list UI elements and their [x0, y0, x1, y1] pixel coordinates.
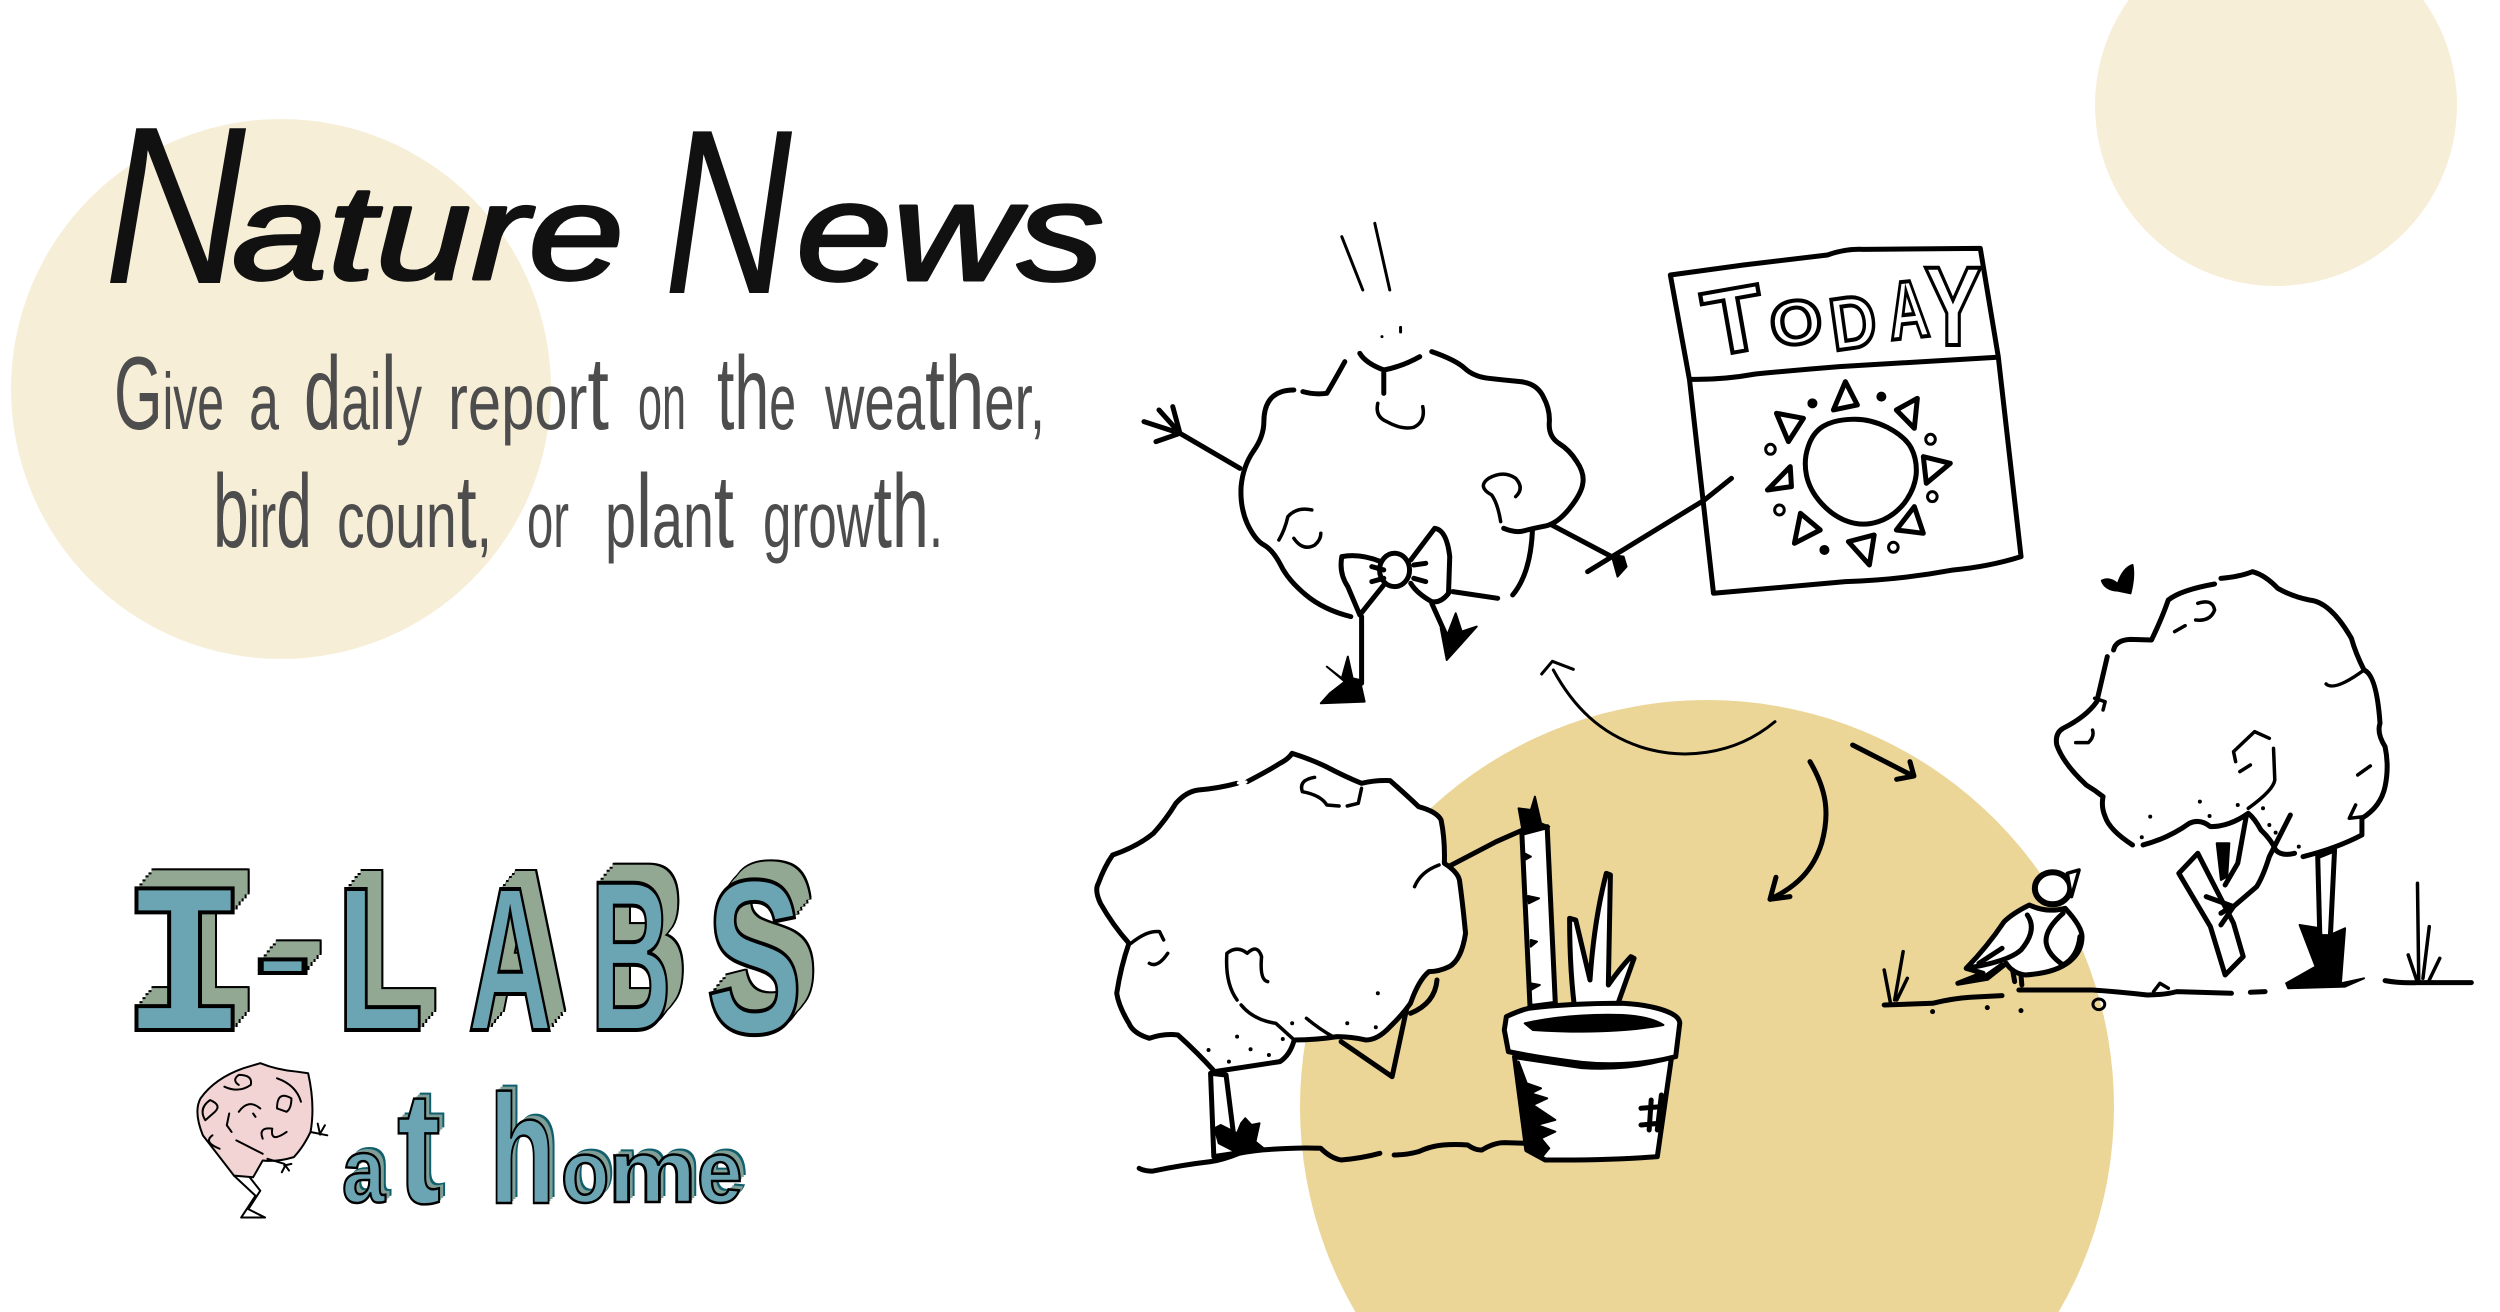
subtitle text: plant [605, 454, 734, 570]
subtitle text: Give [114, 336, 224, 452]
tree second arm [1341, 980, 1437, 1077]
arrows [1542, 661, 1914, 899]
arrow: down to plant [1770, 762, 1826, 899]
bird feet [2013, 970, 2022, 985]
plant leaves [1570, 873, 1634, 1017]
newspaper heading TODAY: D [1825, 278, 1882, 367]
title [104, 79, 1104, 343]
head dots [1382, 327, 1401, 337]
subtitle text: report [448, 336, 609, 452]
brain squiggles [203, 1075, 327, 1172]
ground line left [1139, 1143, 1527, 1171]
ruler tip [1519, 797, 1549, 832]
crown inner curls [1131, 777, 1439, 1040]
presenter feet [1321, 613, 1477, 703]
grass tufts [1884, 883, 2440, 1003]
title: N [664, 80, 792, 343]
newspaper heading TODAY: Y [1924, 244, 1982, 369]
arrow: right to bird [1853, 745, 1914, 779]
presenter right arm and pointer [1552, 478, 1731, 572]
boot [2286, 925, 2364, 988]
bird [1958, 870, 2082, 985]
character: weather presenter [1144, 223, 1731, 703]
presenter hand [1612, 555, 1627, 577]
brain legs [234, 1176, 265, 1218]
tree arm to ruler [1445, 830, 1523, 868]
tree trunk [1211, 1073, 1235, 1157]
presenter legs [1362, 603, 1447, 683]
pale circle behind title [11, 119, 551, 659]
ruler ticks [1525, 853, 1540, 990]
title: ature [232, 157, 624, 308]
leg [2318, 850, 2335, 937]
hollow pebble [2093, 999, 2105, 1010]
soil specks [1933, 1008, 2021, 1012]
arrow: back to presenter [1542, 661, 1775, 754]
newspaper outline [1670, 248, 2021, 593]
brain mascot [197, 1063, 327, 1218]
bow tie [1341, 528, 1450, 615]
tree crown [1097, 753, 1466, 1072]
at home wordmark [342, 1058, 746, 1237]
notebook [2179, 853, 2243, 975]
newspaper heading TODAY: A [1883, 263, 1933, 358]
grass at trunk [1215, 1118, 1264, 1152]
bird wings [1966, 913, 2080, 978]
pot patch [1641, 1095, 1661, 1130]
pencil [2217, 843, 2229, 880]
presenter inner curls [1279, 403, 1520, 547]
pot rim [1504, 1003, 1680, 1065]
ruler [1522, 827, 1555, 1007]
sun rays [1767, 382, 1950, 565]
I-LABS logo [120, 834, 814, 1095]
pot shading [1519, 1062, 1555, 1158]
subtitle text: growth. [763, 454, 943, 570]
at home wordmark: a [342, 1121, 385, 1222]
bird beak [2067, 870, 2079, 897]
motion lines [1342, 223, 1390, 290]
tree inner marks [2076, 602, 2370, 818]
I-LABS logo: - [254, 893, 311, 1021]
subtitle text: bird [213, 454, 312, 570]
subtitle text: daily [304, 336, 422, 452]
subtitle text: on [638, 357, 686, 446]
at home wordmark: h [489, 1063, 555, 1236]
title: N [104, 79, 246, 331]
subtitle text: the [717, 336, 796, 452]
title: ews [796, 153, 1104, 310]
subtitle text: weather, [824, 336, 1045, 452]
sun disc [1805, 419, 1916, 524]
pale circle top right [2095, 0, 2457, 286]
at home wordmark: m [608, 1122, 696, 1221]
heart [2102, 565, 2133, 593]
at home wordmark: o [561, 1122, 609, 1221]
newspaper heading TODAY: T [1696, 266, 1773, 376]
sun dots [1812, 397, 1881, 550]
bird body [1958, 905, 2082, 983]
subtitle text: a [249, 357, 279, 446]
tree with notebook and bird [1884, 565, 2471, 1012]
newspaper heading TODAY [1696, 244, 1982, 376]
subtitle text [114, 336, 1045, 570]
tree speckles [2142, 802, 2299, 847]
subtitle text: or [527, 475, 569, 564]
tree outline [2056, 572, 2387, 857]
I-LABS logo: B [590, 837, 672, 1076]
I-LABS logo: S [706, 834, 803, 1080]
ground lines [1884, 981, 2471, 1005]
brain body [197, 1063, 312, 1177]
crown speckles [1209, 993, 1378, 1062]
I-LABS logo: L [336, 845, 424, 1074]
pot body [1515, 1057, 1672, 1160]
tree fill [2056, 572, 2387, 857]
I-LABS logo: I [120, 851, 249, 1095]
presenter left arm [1144, 407, 1240, 468]
at home wordmark: t [397, 1058, 441, 1237]
I-LABS logo: A [468, 845, 552, 1074]
erase crown gap [1238, 780, 1246, 784]
sun hollow dots [1766, 434, 1937, 552]
newspaper heading TODAY: O [1766, 286, 1827, 361]
newspaper [1670, 248, 2021, 593]
subtitle text: count, [337, 454, 492, 570]
large yellow circle [1300, 700, 2114, 1312]
tree with ruler and plant [1097, 753, 1680, 1171]
soil [1525, 1015, 1663, 1032]
presenter crown outline [1241, 352, 1583, 617]
at home wordmark: e [697, 1122, 743, 1221]
tree arms [2206, 815, 2290, 925]
bird head [2035, 872, 2070, 904]
